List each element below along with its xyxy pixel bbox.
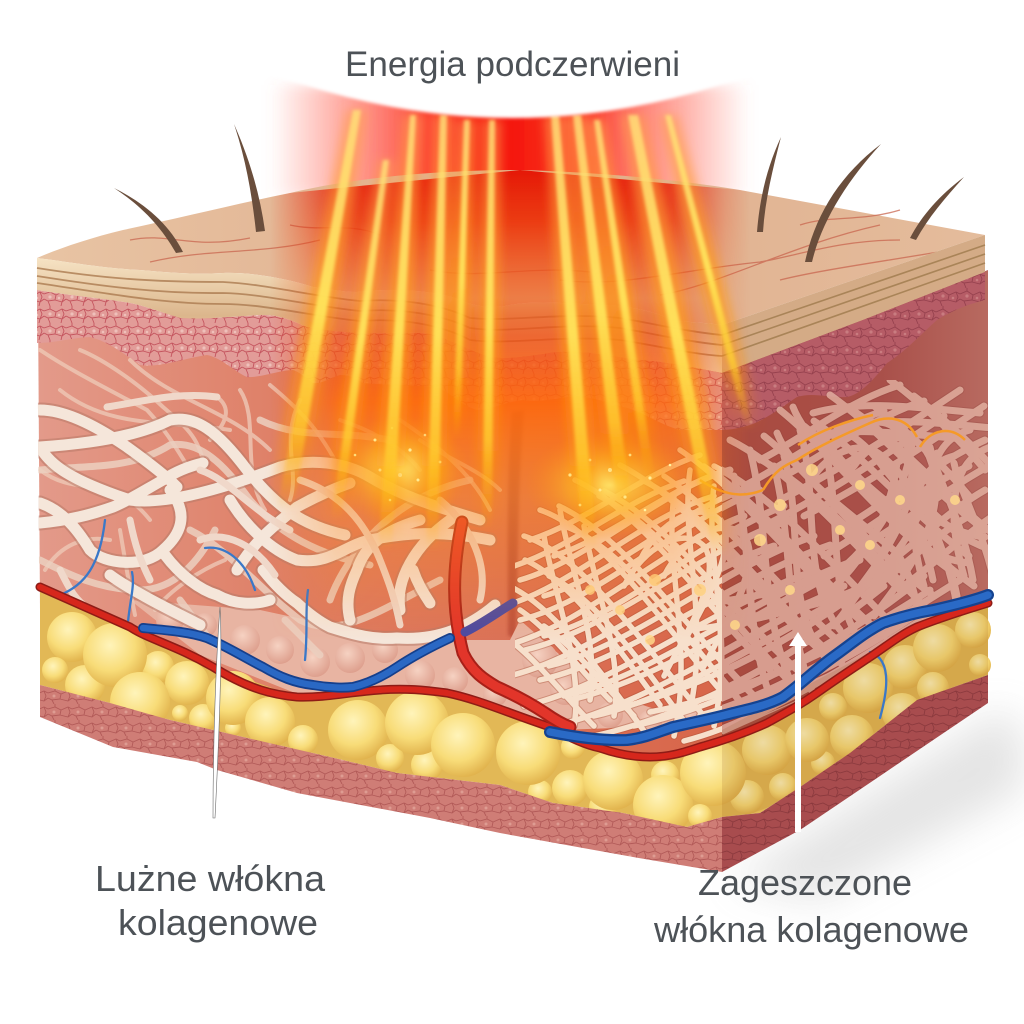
ray halos	[268, 110, 762, 555]
fat lobules	[42, 612, 991, 835]
arrow: dense fibers	[789, 632, 807, 832]
skin surface top face	[37, 170, 985, 325]
infrared rays	[268, 110, 762, 555]
heat sparks right	[525, 430, 695, 540]
label: loose collagen fibers: Lużne włókna	[95, 858, 326, 899]
left face dermis	[38, 300, 722, 770]
bottom connective layer left	[40, 685, 722, 872]
right epidermis band	[722, 235, 985, 373]
lumpy tissue above fat	[130, 600, 702, 734]
block shadow	[730, 710, 1024, 900]
fat layer	[40, 587, 988, 827]
red artery left	[40, 587, 988, 757]
epidermis stripes	[37, 268, 722, 356]
blood vessels	[40, 520, 988, 757]
secondary fiber layer	[40, 420, 470, 655]
blue vein left outline	[143, 628, 450, 688]
pale connective tissue band	[130, 600, 700, 730]
blue vein right	[550, 595, 988, 740]
fiber crossing highlights	[585, 464, 960, 645]
left epidermis band	[37, 258, 722, 373]
bottom connective layer right	[722, 675, 988, 872]
label: dense collagen fibers: Zageszczone	[698, 862, 912, 903]
arrow: loose fibers	[213, 607, 221, 818]
label: loose collagen fibers	[95, 858, 326, 943]
fat side shading	[722, 590, 988, 825]
thick fibers	[40, 410, 495, 638]
label: loose collagen fibers: kolagenowe	[118, 902, 318, 943]
blue vein left	[143, 628, 450, 688]
hair 1	[114, 188, 183, 253]
right epidermis stripes	[722, 245, 985, 356]
ascending artery	[455, 522, 570, 727]
right pink papillary layer	[722, 272, 985, 430]
red artery left outline	[40, 587, 988, 757]
infrared glow over the skin	[270, 165, 750, 645]
left pink papillary layer	[37, 290, 722, 430]
thick fibers outline	[40, 410, 495, 638]
ray cores	[277, 110, 754, 555]
medium fibers	[60, 395, 482, 625]
hair 4	[805, 144, 881, 262]
skin block	[37, 170, 1009, 872]
right face dermis	[722, 270, 988, 770]
orange activated fibers	[700, 415, 965, 494]
heat sparks left	[330, 415, 470, 525]
mesh side face	[722, 380, 988, 734]
fine fibers	[40, 350, 500, 615]
ascending red artery outline	[455, 522, 570, 727]
blue vein right outline	[550, 595, 988, 740]
mesh front face	[515, 447, 722, 745]
label: dense collagen fibers	[653, 862, 969, 950]
loose collagen fibers	[40, 350, 500, 655]
capillaries on skin surface	[130, 210, 950, 295]
central dermis crease	[508, 410, 524, 640]
infrared glow behind skin block	[270, 85, 750, 197]
title: Energia podczerwieni	[345, 45, 680, 84]
small capillaries	[60, 520, 886, 718]
label: dense collagen fibers: włókna kolagenowe	[653, 909, 969, 950]
dense collagen mesh	[504, 380, 1009, 741]
purple vein end	[465, 603, 513, 632]
hair 2	[234, 124, 265, 232]
hair 5	[910, 177, 964, 240]
spark particles	[354, 427, 671, 511]
white emitter arc	[240, 0, 790, 118]
hair 3	[757, 137, 781, 232]
hairs	[114, 124, 964, 262]
